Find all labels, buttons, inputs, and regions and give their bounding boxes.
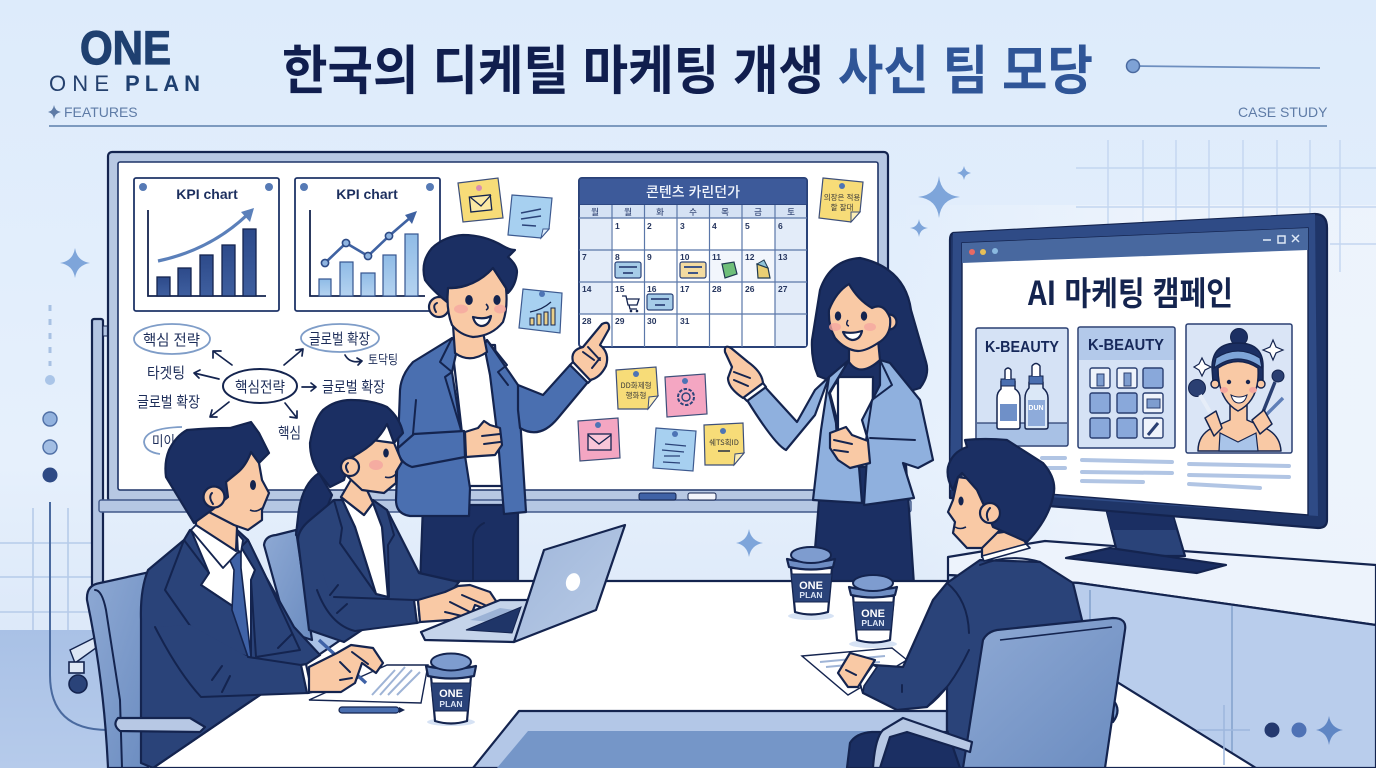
calendar: 12 [745,252,755,262]
neck [196,505,237,551]
coffee cup: left: PLAN [439,699,463,709]
mind map: 글로벌 확장 [137,391,200,412]
calendar: 11 [712,252,721,262]
panel: KPI chart 1 [134,178,279,311]
legs [847,732,960,768]
sticky note: top right: 할 잘대 [831,202,853,213]
chair back [963,618,1125,768]
title bar [962,228,1308,263]
card: product grid [1078,327,1175,448]
paper: left [309,665,428,703]
whiteboard stand [92,319,108,599]
arm [318,570,417,631]
ear [882,314,896,330]
sticky note: yellow text: 행화형 [626,390,646,401]
calendar: 26 [745,284,755,294]
face [948,477,1000,548]
presenter: man [396,235,609,585]
mind map: 핵심전략 [235,376,285,397]
arm [155,625,309,697]
whiteboard [99,152,911,512]
calendar: 1 [615,221,620,231]
jacket left panel [813,360,862,503]
calendar: 3 [680,221,685,231]
decorative grid: left [0,508,100,630]
pointing arm [747,377,829,450]
floor band [0,630,1376,768]
console desk [948,541,1376,768]
calendar: 10 [680,252,690,262]
ear [429,297,449,317]
hand [838,653,875,687]
bottom-right ornaments [1197,705,1343,765]
panel: KPI chart 1: KPI chart [176,186,238,202]
calendar: 31 [680,316,690,326]
left chair wheel [69,635,100,693]
sticky note: yellow text: DD화제형 [620,380,652,391]
dotted timeline [42,305,58,482]
screen text lines [1042,458,1289,488]
calendar: 6 [778,221,783,231]
neck [453,325,487,358]
chair arm: seated man [115,718,205,732]
facial features [465,295,473,305]
shirt [838,377,873,467]
calendar: 29 [615,316,625,326]
cuff [860,665,877,693]
hand [309,645,383,692]
calendar: 15 [615,284,625,294]
coffee cup: centre: ONE [799,580,823,592]
neck [982,530,1027,557]
screen [962,228,1308,515]
logo: ONE [80,21,171,74]
laptop [421,525,625,642]
calendar [579,178,807,347]
calendar: 27 [778,284,788,294]
panel: KPI chart 2 [295,178,440,311]
card: serum bottles [976,328,1068,446]
calendar: 30 [647,316,657,326]
coffee cup: centre [787,547,835,620]
mind map: 핵심 전략 [143,329,200,350]
brushes [1188,380,1206,396]
hair [424,235,517,302]
calendar: 수 [689,207,697,217]
sticky note: blue text [653,428,696,471]
tie [228,552,251,657]
face [829,284,890,351]
hair [948,439,1054,542]
card: serum bottles: K-BEAUTY [985,339,1060,356]
panel: KPI chart 2: KPI chart [336,186,398,202]
calendar: 9 [647,252,652,262]
face [346,440,402,493]
collar [982,544,1030,561]
calendar: 16 [647,284,657,294]
sticky note: yellow bottom: 쉐TS획ID [709,437,739,448]
screen title: AI 마케팅 캠페인 [1027,267,1233,315]
collar [191,525,243,568]
sparkles [60,166,971,557]
logo: PLAN [125,71,200,96]
mind map: 글로벌 확장 [322,376,385,397]
calendar: 14 [582,284,592,294]
ponytail [296,473,332,545]
coffee cup: left: ONE [439,688,463,700]
card: beauty model [1186,324,1292,453]
mind map: 핵심 [278,422,301,443]
shirt [452,345,504,486]
seated man's chair [87,572,150,768]
jacket [298,500,459,642]
pointing hand [725,347,763,398]
chest hand [465,421,502,457]
calendar: 4 [712,221,717,231]
left vertical line with curve [50,502,108,730]
features label: FEATURES [64,104,138,120]
calendar: 월 [591,207,599,217]
calendar: 5 [745,221,750,231]
back hair [812,258,927,400]
header ornament [1126,60,1320,72]
paper: right [802,648,907,695]
monitor [950,214,1327,573]
shirt [341,497,388,597]
seated man [141,422,383,768]
mind map: 미이 [152,431,175,451]
calendar: 8 [615,252,620,262]
calendar: 13 [778,252,788,262]
right seated man [838,439,1125,768]
coffee cup: right [849,575,897,648]
neck [341,478,373,515]
sticky note: top right [819,178,863,222]
hands [418,585,498,622]
sticky note: pink envelope [578,418,620,461]
skirt [812,465,914,585]
calendar: 콘텐츠 카린던가 [646,182,740,202]
face [205,452,269,530]
jacket lapels [165,540,248,657]
woman's chair [264,530,312,640]
calendar: 월 [624,207,632,217]
pen [319,640,366,683]
sticky note: gear [665,374,707,417]
pen on table [339,707,405,713]
chest hand [830,427,870,468]
hair [165,422,269,523]
stand [1107,512,1185,556]
shirt [191,530,255,657]
sticky note: envelope [458,178,503,222]
sticky note: yellow text [616,367,658,409]
face [448,268,507,337]
chair side knob [1113,700,1118,722]
coffee cup: left [426,654,476,726]
meeting table [153,581,1256,768]
trousers [420,505,518,585]
chair arm [873,718,972,768]
pointing hand [572,323,609,380]
jacket right panel [484,340,526,514]
frame [950,214,1327,528]
sticky note: top right: 의장은 적용 [824,192,860,203]
header rule [49,125,1327,127]
sticky note: blue lines [508,195,552,238]
calendar: 목 [721,207,729,217]
calendar: 28 [582,316,592,326]
jacket right panel [862,360,933,505]
case study label: CASE STUDY [1238,104,1328,120]
calendar: 2 [647,221,652,231]
card: serum bottles: DUN [1028,405,1044,412]
calendar: 28 [712,284,722,294]
mind map: 타겟팅 [147,362,185,383]
logo: ONE [49,71,109,96]
mind map: 글로벌 확장 [309,328,370,349]
sticky note: yellow bottom [704,423,744,465]
facial features [835,311,841,321]
hair [310,400,403,487]
neck [849,340,880,370]
calendar: 화 [656,207,664,217]
card: product grid: K-BEAUTY [1088,337,1165,354]
right wall panel [900,205,1376,625]
title: 한국의 디케틸 마케팅 개생 사신 팀 모당 [282,29,1093,105]
coffee cup: centre: PLAN [799,590,823,600]
calendar: 금 [754,207,762,217]
calendar: 17 [680,284,690,294]
mind map [134,324,398,454]
jacket body [141,530,320,768]
coffee cup: right: ONE [861,608,885,620]
calendar: 토 [787,207,795,217]
jacket left panel [396,338,470,516]
calendar: 7 [582,252,587,262]
torso [860,560,1085,768]
coffee cup: right: PLAN [861,618,885,628]
mind map: 토닥팅 [368,349,398,368]
sticky note: chart [519,289,562,333]
logo [49,21,200,96]
pointing arm [518,365,588,432]
presenter: woman [725,258,933,585]
seated woman [296,400,498,642]
decorative grid: top right [1076,140,1376,272]
